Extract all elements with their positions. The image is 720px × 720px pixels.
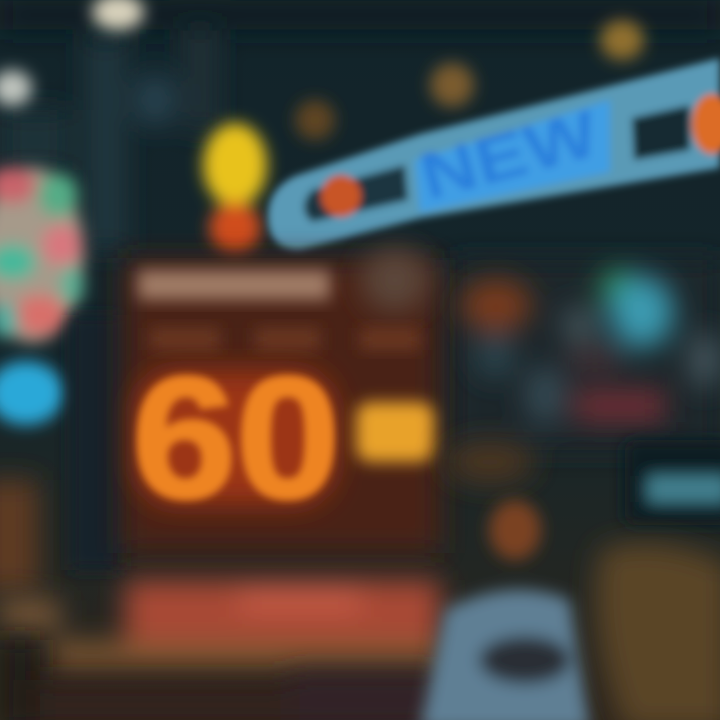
glow behind 60: [135, 370, 335, 505]
scoreboard panel: [122, 248, 440, 553]
big number 60: 60: [132, 342, 340, 534]
foreground dark base: [0, 640, 440, 720]
person in blue: [420, 500, 590, 720]
ceiling lights: [0, 0, 644, 140]
board title: [138, 270, 330, 300]
blue neon sign: [268, 58, 720, 250]
yellow display: [356, 402, 434, 462]
yellow and orange bulbs: [203, 123, 267, 254]
ceiling structure: [0, 0, 720, 450]
colourful ball at left: [0, 167, 84, 343]
sign text: NEW: [412, 95, 606, 214]
column labels: [150, 328, 420, 350]
right monitor: [625, 440, 720, 525]
brown left block: [0, 480, 38, 590]
cyan light: [0, 361, 64, 425]
table surface: [0, 580, 440, 670]
green and teal lights: [445, 270, 720, 484]
board corner icon: [361, 248, 429, 312]
brown foreground figure: [596, 543, 720, 720]
dark pillar: [70, 315, 122, 570]
